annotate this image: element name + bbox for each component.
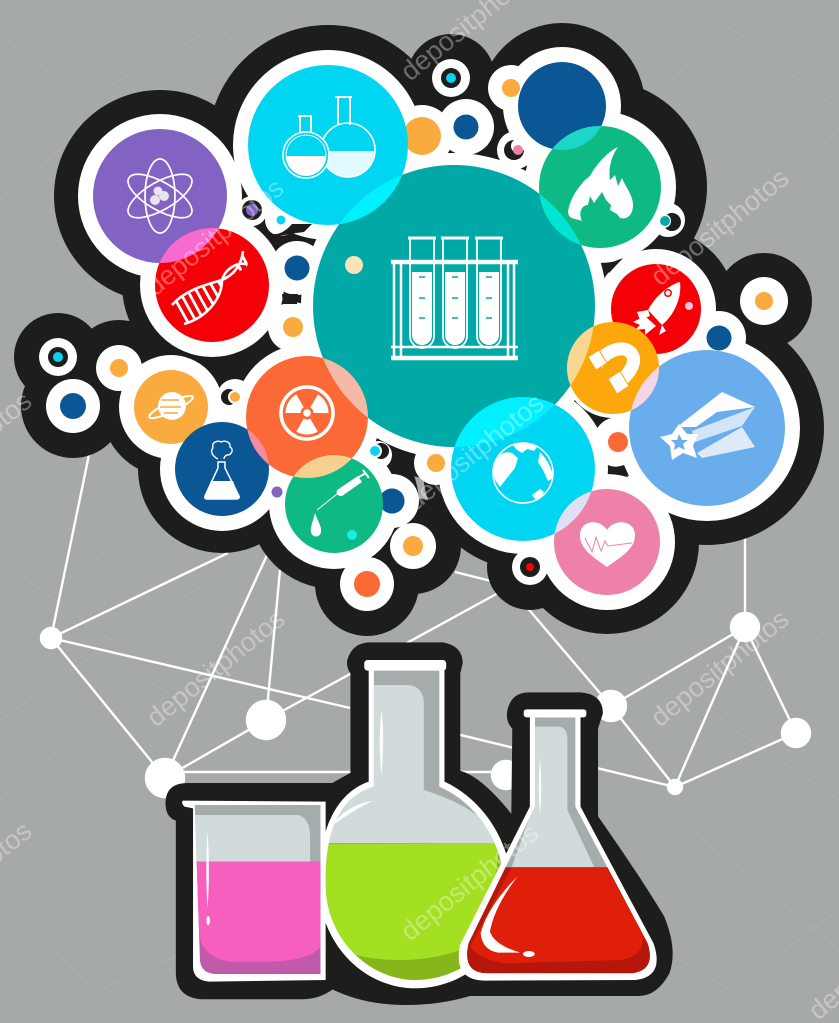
panel: heart bbox=[554, 489, 660, 595]
watermarks: depositphotos bbox=[141, 604, 290, 733]
icon: radiation symbol bbox=[281, 387, 333, 439]
molecular network bbox=[41, 450, 810, 797]
panel: centre test tubes bbox=[313, 165, 595, 447]
panel: chemistry flasks bbox=[248, 65, 408, 225]
icon: shooting star bbox=[660, 392, 755, 460]
flasks black outline bbox=[167, 643, 672, 1004]
icon: syringe and drop bbox=[311, 470, 369, 536]
panel: erupting flask bbox=[175, 422, 269, 516]
round flask lip bbox=[364, 660, 446, 671]
panel: planet bbox=[134, 370, 208, 444]
laboratory glassware bbox=[167, 643, 672, 1004]
panel: DNA bbox=[155, 228, 269, 342]
icon: test tube rack bbox=[391, 238, 518, 358]
icon: rocket bbox=[633, 282, 680, 335]
icon: twin round flasks bbox=[283, 97, 375, 178]
panel: navy circle bbox=[518, 62, 606, 150]
small black gaps bbox=[48, 68, 681, 577]
conical flask lip bbox=[524, 709, 586, 717]
icon: erupting flask bbox=[205, 441, 239, 499]
watermarks: depositphotos bbox=[400, 388, 549, 517]
watermarks: depositphotos bbox=[645, 604, 794, 733]
panel: light blue star bbox=[629, 350, 785, 506]
conical flask bbox=[459, 717, 657, 981]
watermarks: depositphotos bbox=[395, 818, 544, 947]
panel: fire bbox=[539, 126, 661, 248]
icon: horseshoe magnet bbox=[588, 349, 634, 394]
white bubble rings bbox=[39, 47, 800, 611]
black bubble cloud outline bbox=[14, 23, 824, 636]
icon: heart with pulse bbox=[580, 522, 635, 567]
panel: atom bbox=[93, 129, 227, 263]
watermarks: depositphotos bbox=[140, 173, 289, 302]
small coloured dots bbox=[53, 73, 773, 597]
panel: rocket bbox=[611, 264, 701, 354]
panel: syringe bbox=[285, 455, 404, 553]
icon: planet bbox=[147, 392, 195, 422]
round flask bbox=[319, 668, 512, 988]
watermarks: depositphotos bbox=[645, 163, 794, 292]
panel: radiation bbox=[246, 356, 368, 476]
icon: globe bbox=[493, 443, 553, 503]
icon: flame bbox=[568, 147, 633, 221]
panel: magnet bbox=[567, 322, 659, 414]
beaker bbox=[182, 801, 326, 982]
icon: DNA helix bbox=[171, 250, 248, 326]
icon: atom bbox=[122, 159, 198, 233]
panel: earth bbox=[451, 397, 595, 541]
